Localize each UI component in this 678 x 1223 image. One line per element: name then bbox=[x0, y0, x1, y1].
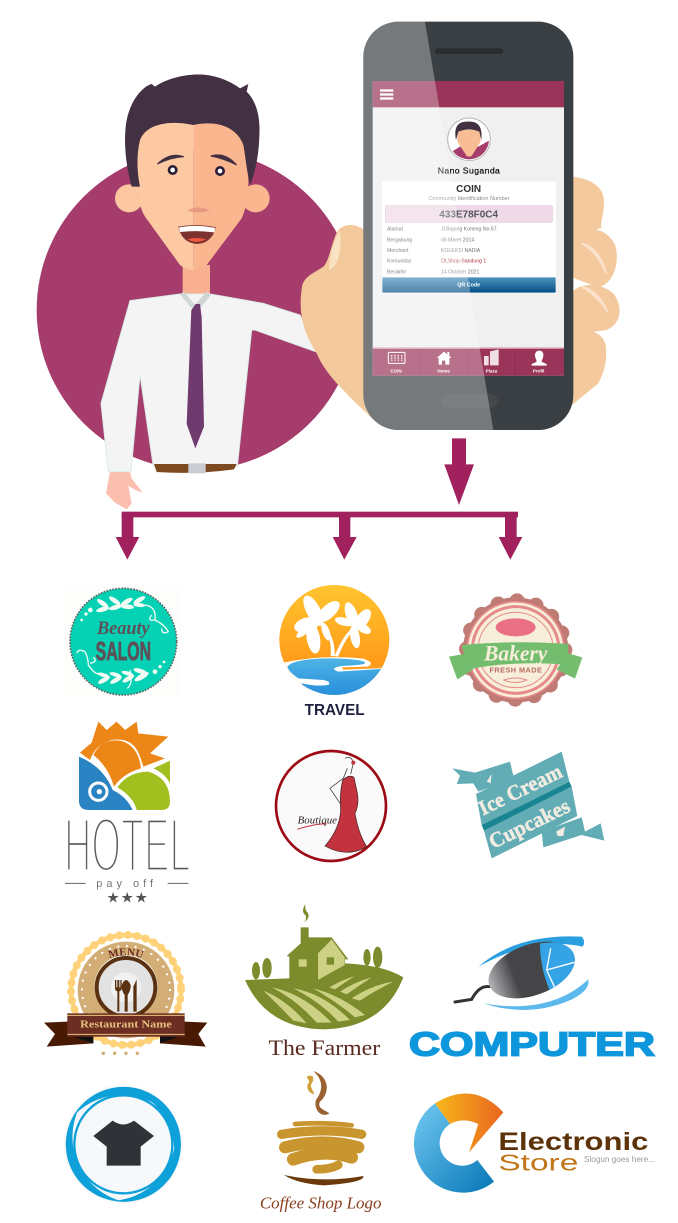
thumb and palm bbox=[301, 225, 373, 420]
logo: Restaurant bbox=[44, 931, 208, 1055]
detail rows: Merchant bbox=[387, 248, 409, 254]
QR code button: QR Code bbox=[457, 283, 480, 289]
icon: home bbox=[437, 352, 451, 365]
purple background circle bbox=[37, 150, 357, 470]
neck bbox=[183, 265, 210, 300]
text: HOTEL bbox=[64, 803, 191, 889]
home button bbox=[442, 394, 498, 407]
tie bbox=[187, 304, 204, 448]
detail rows: OLShop Bandung 1 bbox=[441, 259, 486, 265]
hair bbox=[125, 74, 260, 187]
eyebrows bbox=[157, 155, 237, 165]
logo: Bakery: Bakery bbox=[483, 641, 548, 666]
logo: Electronic Store: Store bbox=[498, 1150, 578, 1176]
card title: COIN bbox=[456, 184, 481, 195]
detail rows: Jl.Bojong Koneng No.67 bbox=[441, 226, 497, 232]
identification number box bbox=[385, 206, 552, 222]
nav labels bbox=[390, 369, 544, 374]
logo: Beauty Salon: Beauty bbox=[96, 618, 150, 639]
belt buckle bbox=[188, 463, 206, 473]
app header bar bbox=[373, 81, 564, 107]
phone bbox=[363, 22, 573, 430]
eyes bbox=[168, 165, 225, 176]
logo: T-shirt store bbox=[47, 1073, 200, 1220]
screen background bbox=[373, 81, 564, 376]
thumb nail bbox=[329, 230, 341, 270]
QR code button bbox=[382, 277, 556, 293]
nav labels: Home bbox=[437, 369, 450, 374]
logo: Coffee Shop: Coffee Shop Logo bbox=[260, 1194, 382, 1213]
nav labels: COIN bbox=[390, 369, 402, 374]
mouth bbox=[178, 225, 216, 244]
illustration: man character bbox=[37, 74, 373, 509]
profile avatar bbox=[448, 118, 490, 161]
illustration: fingers behind phone bbox=[568, 177, 620, 407]
logo: Electronic Store: Slogun goes here... bbox=[584, 1154, 655, 1164]
middle arrow bbox=[333, 515, 357, 560]
user name: Nano Suganda bbox=[438, 166, 500, 176]
logo: Boutique bbox=[276, 751, 386, 861]
face bbox=[137, 113, 193, 270]
identification number box: 433E78F0C4 bbox=[439, 210, 499, 221]
logo: Restaurant: Restaurant Name bbox=[80, 1019, 173, 1030]
left arrow bbox=[116, 515, 139, 560]
logo: Coffee Shop bbox=[260, 1071, 382, 1213]
detail rows: Berakhir bbox=[387, 270, 406, 276]
detail rows: Bergabung bbox=[387, 237, 412, 243]
nav labels: Profil bbox=[533, 369, 544, 374]
right arrow bbox=[499, 515, 522, 560]
nav labels: Plaza bbox=[486, 369, 498, 374]
logo: Hotel: pay off bbox=[96, 878, 157, 890]
logo: Boutique: Boutique bbox=[298, 814, 337, 826]
logo: Restaurant: MENU bbox=[108, 948, 144, 958]
hanging hand bbox=[106, 472, 143, 509]
logo: Bakery bbox=[449, 597, 582, 703]
logo: Beauty Salon bbox=[63, 585, 182, 696]
icon: plaza bbox=[484, 349, 499, 365]
COIN card bbox=[382, 182, 556, 293]
card subtitle: Community Identification Number bbox=[428, 196, 510, 202]
logo: The Farmer: The Farmer bbox=[268, 1035, 381, 1060]
logo: Electronic Store bbox=[414, 1094, 655, 1193]
detail rows: Komunitas bbox=[387, 259, 412, 265]
detail rows bbox=[387, 226, 497, 276]
face shaded side bbox=[193, 113, 248, 270]
collar bbox=[180, 292, 211, 307]
horizontal connector bbox=[122, 512, 518, 517]
ears bbox=[115, 184, 270, 212]
logo: Travel bbox=[277, 585, 393, 719]
logo: The Farmer bbox=[245, 904, 403, 1060]
logo: Computer: COMPUTER bbox=[409, 1026, 655, 1063]
nose bbox=[187, 207, 210, 212]
logo: Hotel bbox=[64, 722, 191, 906]
hamburger menu icon bbox=[380, 89, 393, 100]
speaker slot bbox=[435, 48, 503, 54]
logo: Bakery: FRESH MADE bbox=[489, 666, 542, 675]
logo: Ice Cream Cupcakes: Ice Cream bbox=[475, 759, 566, 820]
phone body bbox=[363, 22, 573, 430]
detail rows: KOLEKSI NADIA bbox=[441, 248, 481, 254]
glass reflection bbox=[363, 22, 493, 430]
main arrow bbox=[444, 438, 474, 505]
logo: Ice Cream Cupcakes bbox=[452, 752, 604, 858]
logo: Electronic Store: Electronic bbox=[498, 1128, 648, 1156]
shirt bbox=[101, 294, 318, 472]
belt bbox=[154, 464, 237, 473]
logo: Computer bbox=[409, 931, 655, 1063]
icon: coin card bbox=[388, 352, 405, 363]
detail rows: 06 Maret 2014 bbox=[441, 237, 474, 243]
logo: Beauty Salon: SALON bbox=[96, 636, 151, 666]
detail rows: Alamat bbox=[387, 226, 404, 232]
bottom navigation bbox=[373, 347, 564, 376]
arrows: distribution connector bbox=[116, 438, 522, 560]
icon: profile bbox=[532, 351, 547, 366]
logo: Travel: TRAVEL bbox=[305, 702, 365, 719]
logo: Ice Cream Cupcakes: Cupcakes bbox=[485, 794, 574, 854]
logo: Hotel: ★★★ bbox=[106, 889, 149, 906]
detail rows: 14 Oktober 2021 bbox=[441, 270, 480, 276]
